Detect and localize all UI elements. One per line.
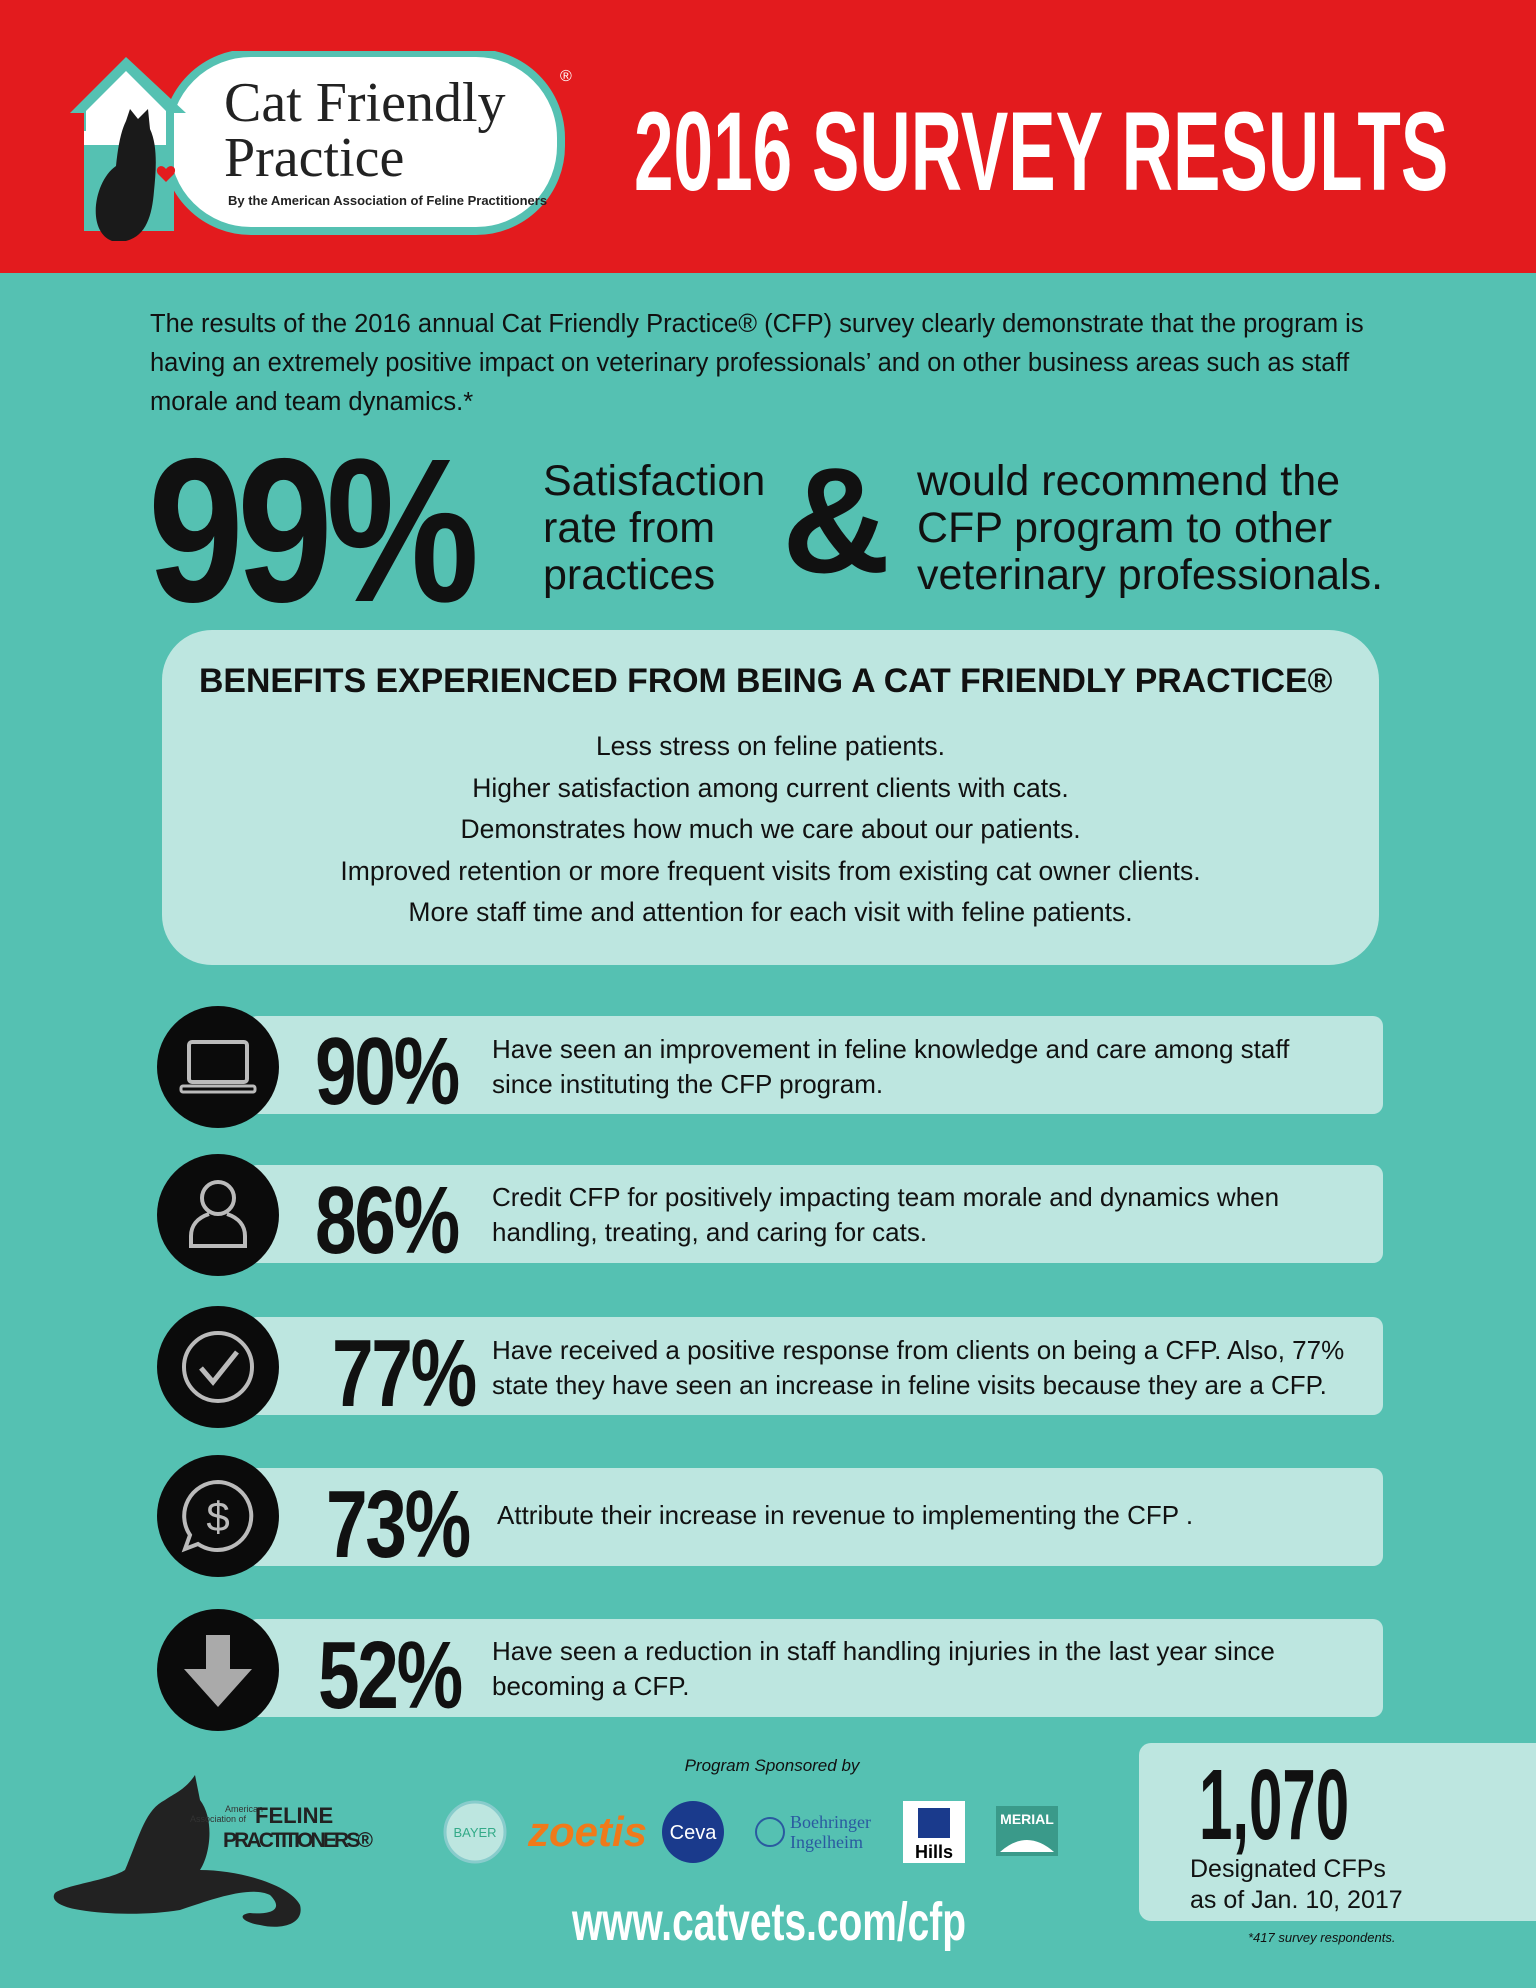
logo: Cat Friendly Practice: Practice <box>224 127 404 189</box>
sponsor logos: BAYER <box>453 1825 497 1840</box>
sponsor logos: zoetis <box>527 1808 647 1855</box>
intro text: The results of the 2016 annual Cat Friendly Practice® (CFP) survey clearly demonstrate that the program is having an extremely positive impact on veterinary professionals’ and on other business areas such as staff morale and team dynamics.* <box>150 310 1364 416</box>
title: 2016 SURVEY RESULTS <box>634 89 1448 214</box>
logo: Cat Friendly Practice <box>70 51 572 241</box>
benefits list: Less stress on feline patients. <box>596 731 945 761</box>
row: 86%: handling, treating, and caring for cats. <box>492 1217 927 1247</box>
1,070 number: 1,070 <box>1199 1749 1349 1861</box>
designated text: Designated CFPs <box>1190 1855 1386 1883</box>
header band <box>0 0 1536 273</box>
row: 73%: Attribute their increase in revenue to implementing the CFP . <box>497 1500 1193 1530</box>
AAFP logo with cat silhouette: FELINE <box>255 1803 333 1828</box>
stat 52%: 52% <box>318 1622 461 1729</box>
AAFP logo with cat silhouette: American <box>225 1804 263 1814</box>
satisfaction text <box>543 457 765 599</box>
panel: benefits <box>162 630 1379 965</box>
designated text <box>1190 1855 1403 1914</box>
big stat 99%: 99% <box>148 416 473 645</box>
recommend text <box>917 457 1383 599</box>
panel: designated CFPs count <box>1139 1743 1536 1921</box>
satisfaction text: Satisfaction <box>543 457 765 505</box>
website url: www.catvets.com/cfp <box>572 1892 966 1952</box>
row: 90%: since instituting the CFP program. <box>492 1069 883 1099</box>
footnote: *417 survey respondents. <box>1248 1930 1395 1945</box>
row: 52%: becoming a CFP. <box>492 1671 690 1701</box>
row: 77%: Have received a positive response from clients on being a CFP. Also, 77% <box>492 1335 1344 1365</box>
logo: Cat Friendly Practice: ® <box>560 68 572 85</box>
icon: down arrow <box>157 1609 279 1731</box>
row: 52% <box>157 1609 1383 1731</box>
AAFP logo with cat silhouette: Association of <box>190 1814 247 1824</box>
sponsor logos: MERIAL <box>1000 1811 1054 1827</box>
row: 52%: Have seen a reduction in staff handling injuries in the last year since <box>492 1636 1275 1666</box>
sponsor logos: Ceva <box>670 1822 717 1844</box>
icon: person <box>157 1154 279 1276</box>
row: 90%: Have seen an improvement in feline knowledge and care among staff <box>492 1034 1289 1064</box>
ampersand: & <box>782 436 890 604</box>
sponsor logos: Hills <box>915 1842 953 1862</box>
benefits list: Higher satisfaction among current clients with cats. <box>472 772 1069 802</box>
icon: dollar bubble <box>157 1455 279 1577</box>
icon: check <box>157 1306 279 1428</box>
sponsor logos: Boehringer <box>790 1812 871 1832</box>
stat 86%: 86% <box>315 1167 458 1274</box>
recommend text: veterinary professionals. <box>917 551 1383 599</box>
sponsor label: Program Sponsored by <box>685 1756 859 1775</box>
row: 73% <box>157 1455 1383 1578</box>
AAFP logo with cat silhouette: PRACTITIONERS® <box>223 1829 374 1852</box>
stat 77%: 77% <box>332 1320 475 1427</box>
satisfaction text: rate from <box>543 504 715 552</box>
benefits list: More staff time and attention for each visit with feline patients. <box>408 897 1133 927</box>
benefits list <box>340 731 1201 927</box>
stat 73%: 73% <box>326 1471 469 1578</box>
row: 86%: Credit CFP for positively impacting team morale and dynamics when <box>492 1182 1279 1212</box>
AAFP logo with cat silhouette <box>54 1775 374 1927</box>
satisfaction text: practices <box>543 551 715 599</box>
logo: Cat Friendly Practice: Cat Friendly <box>224 72 506 134</box>
benefits list: Improved retention or more frequent visits from existing cat owner clients. <box>340 856 1201 886</box>
row: 77%: state they have seen an increase in feline visits because they are a CFP. <box>492 1370 1327 1400</box>
logo: Cat Friendly Practice: By the American Association of Feline Practitioners <box>228 193 547 208</box>
row: 86% <box>157 1154 1383 1276</box>
stat 90%: 90% <box>315 1018 458 1125</box>
sponsor logos <box>444 1800 1058 1864</box>
icon: laptop <box>157 1006 279 1128</box>
row: 77% <box>157 1306 1383 1428</box>
row: 90% <box>157 1006 1383 1128</box>
recommend text: CFP program to other <box>917 504 1332 552</box>
benefits heading: BENEFITS EXPERIENCED FROM BEING A CAT FRIENDLY PRACTICE® <box>199 662 1332 700</box>
sponsor logos: Ingelheim <box>790 1832 863 1852</box>
benefits list: Demonstrates how much we care about our patients. <box>460 814 1081 844</box>
icon: dollar bubble: $ <box>206 1493 230 1540</box>
recommend text: would recommend the <box>917 457 1340 505</box>
designated text: as of Jan. 10, 2017 <box>1190 1886 1403 1914</box>
